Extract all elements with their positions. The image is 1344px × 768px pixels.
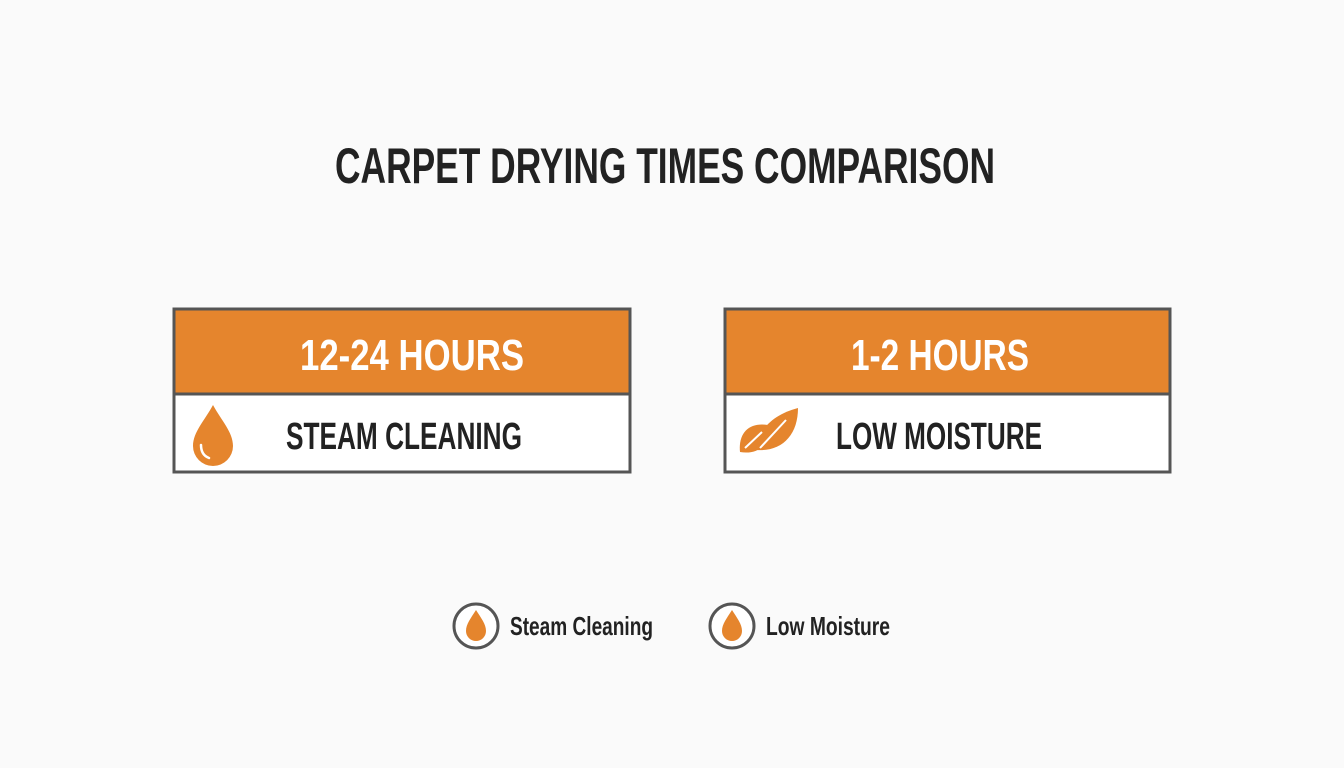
label: steam cleaning: STEAM CLEANING <box>286 416 522 458</box>
header: 1-2 hours: 1-2 HOURS <box>851 331 1029 380</box>
panel: steam cleaning <box>174 309 630 472</box>
title: CARPET DRYING TIMES COMPARISON <box>335 138 995 194</box>
label: low moisture: LOW MOISTURE <box>836 416 1042 458</box>
icon: leaves <box>740 408 798 453</box>
legend item: steam cleaning <box>454 604 653 648</box>
legend item: low moisture: Low Moisture <box>766 611 890 641</box>
legend <box>454 604 890 648</box>
panel: low moisture <box>725 309 1170 472</box>
legend item: low moisture <box>710 604 890 648</box>
header: 12-24 hours <box>174 310 630 394</box>
icon: water drop <box>193 405 233 466</box>
header: 12-24 hours: 12-24 HOURS <box>300 331 524 380</box>
legend item: steam cleaning: Steam Cleaning <box>510 611 653 641</box>
header: 1-2 hours <box>725 310 1170 394</box>
